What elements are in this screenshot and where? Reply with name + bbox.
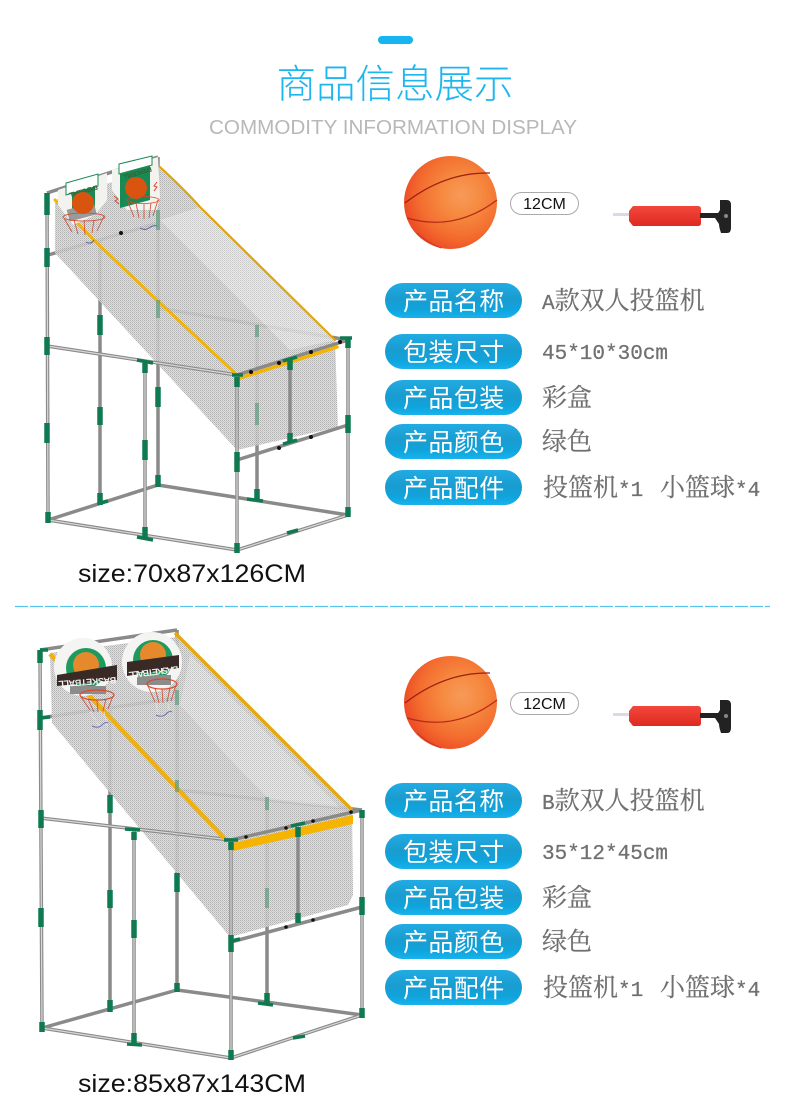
- pill: colour: 产品颜色: [403, 929, 505, 957]
- pill: package size: 包装尺寸: [403, 839, 505, 867]
- pill: product name: [385, 783, 522, 818]
- value: product name: A款双人投篮机: [542, 281, 705, 317]
- pill: packaging: 产品包装: [403, 885, 505, 913]
- value: product name: B款双人投篮机: [542, 781, 705, 817]
- pill: packaging: 产品包装: [403, 385, 505, 413]
- frame A back pipes: [47, 157, 348, 520]
- frame A horizontal sleeves: [100, 338, 352, 540]
- mini basketball A: [404, 156, 497, 249]
- frame B pipe highlight: [40, 650, 362, 1058]
- pill: product name: 产品名称: [403, 288, 505, 316]
- net A: [55, 167, 338, 450]
- frame A back sleeves: [100, 315, 257, 505]
- 12CM badge A: 12CM: [523, 196, 566, 213]
- value: accessories: 投篮机*1: [543, 968, 643, 1004]
- value: accessories: 小篮球: [660, 968, 735, 1004]
- frame A pipe highlight: [47, 193, 348, 550]
- pill: package size: [385, 334, 522, 369]
- faded sleeves behind net A: [158, 210, 257, 425]
- frame B back sleeves: [110, 795, 267, 1012]
- frame B front pipes: [40, 650, 362, 1058]
- pill: accessories: 产品配件: [403, 475, 505, 503]
- frame A front sleeves: [47, 193, 348, 553]
- value: accessories: 小篮球: [660, 468, 735, 504]
- value: accessories: 投篮机*1: [543, 468, 643, 504]
- hoop A right: [112, 156, 160, 230]
- pill: package size: 包装尺寸: [403, 339, 505, 367]
- frame B horizontal sleeves: [40, 650, 305, 1045]
- value: package size: 35*12*45cm: [542, 843, 668, 866]
- size label B: size:85x87x143CM: [78, 1070, 306, 1098]
- hoop A left: [58, 173, 107, 243]
- 12CM badge B: [510, 692, 578, 714]
- hoop B left: BASKETBALL: [58, 675, 117, 689]
- yellow trim A: [55, 167, 337, 378]
- frame A front pipes: [47, 193, 348, 550]
- pill: product name: 产品名称: [403, 788, 505, 816]
- size label A: size:70x87x126CM: [78, 560, 306, 588]
- value: accessories: *4: [735, 480, 760, 503]
- pill: colour: 产品颜色: [403, 429, 505, 457]
- air pump A: [613, 200, 731, 233]
- title: 商品信息展示: [276, 53, 514, 110]
- clips A: [119, 231, 342, 450]
- hoop B right: [122, 632, 182, 716]
- value: accessories: *4: [735, 980, 760, 1003]
- hoop B left: [54, 638, 117, 727]
- pill: packaging: [385, 880, 522, 915]
- yellow trim B: [50, 633, 353, 851]
- hoop B right: BASKETBALL: [128, 664, 179, 680]
- 12CM badge A: [510, 192, 578, 214]
- pill: colour: [385, 424, 522, 459]
- value: colour: 绿色: [542, 922, 592, 958]
- frame B back pipes: [40, 630, 362, 1028]
- pill: product name: [385, 283, 522, 318]
- pill: package size: [385, 834, 522, 869]
- pill: colour: [385, 924, 522, 959]
- mini basketball B: [404, 656, 497, 749]
- pill: accessories: [385, 470, 522, 505]
- frame B front sleeves: [40, 650, 362, 1060]
- spec table B: [385, 781, 760, 1005]
- hoop A right: BASKETBALL: [122, 165, 152, 180]
- subtitle: COMMODITY INFORMATION DISPLAY: [209, 116, 577, 139]
- value: packaging: 彩盒: [542, 878, 592, 914]
- hoop A left: BASKETBALL: [68, 183, 98, 198]
- pill: packaging: [385, 380, 522, 415]
- header accent bar: [378, 36, 413, 44]
- pill: accessories: [385, 970, 522, 1005]
- 12CM badge B: 12CM: [523, 696, 566, 713]
- value: package size: 45*10*30cm: [542, 343, 668, 366]
- value: colour: 绿色: [542, 422, 592, 458]
- product A: basketball machine illustration: [47, 156, 352, 553]
- clips B: [244, 810, 353, 929]
- net B: [50, 637, 353, 937]
- spec table A: [385, 281, 760, 505]
- value: packaging: 彩盒: [542, 378, 592, 414]
- product B: basketball machine illustration: [40, 630, 362, 1060]
- air pump B: [613, 700, 731, 733]
- pill: accessories: 产品配件: [403, 975, 505, 1003]
- faded sleeves behind net B: [177, 690, 267, 908]
